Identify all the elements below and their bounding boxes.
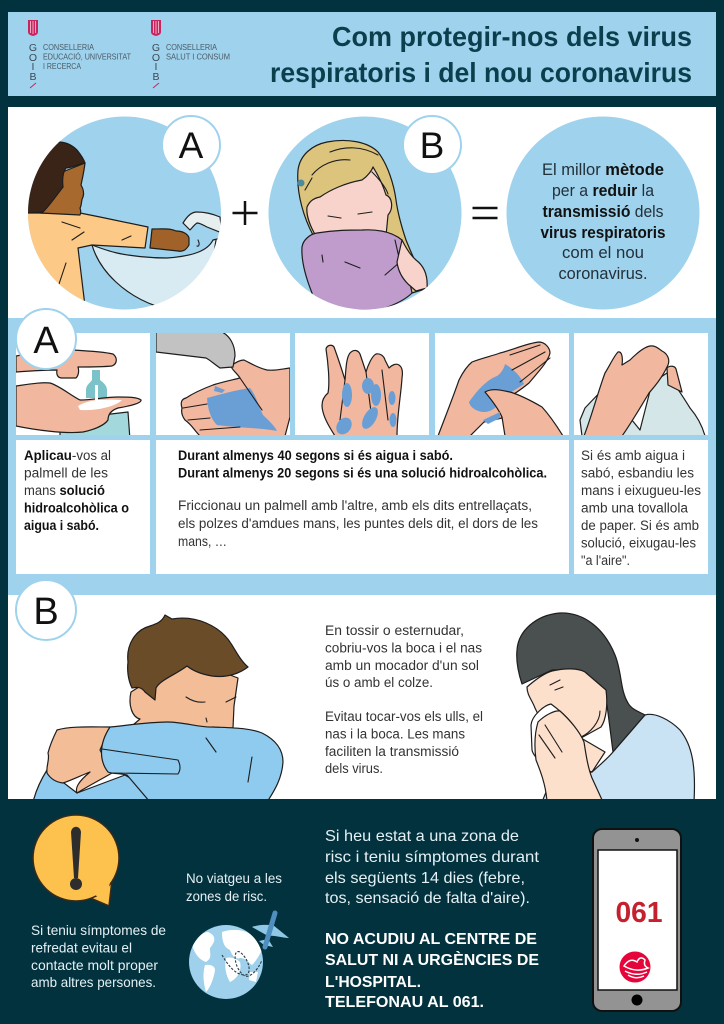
callout: best method circle: com el nou xyxy=(562,244,644,262)
badge: section B xyxy=(16,580,76,640)
text cell: apply soap: Aplicau-vos al xyxy=(24,448,111,463)
warning: contact advice xyxy=(31,815,166,990)
icon: emergency service logo xyxy=(620,952,650,982)
panel: A + B = equation xyxy=(8,107,716,318)
panel: A hand washing steps xyxy=(8,309,716,595)
text block: cough advice: cobriu-vos la boca i el nas xyxy=(325,640,482,656)
callout: best method circle: virus respiratoris xyxy=(540,224,666,242)
text block: symptoms advice xyxy=(31,922,166,990)
text block: symptoms advice: Si teniu símptomes de xyxy=(31,922,166,938)
illustration: child washing hands xyxy=(20,116,230,310)
travel advice xyxy=(186,870,289,999)
text cell: duration and rubbing: mans, … xyxy=(178,533,227,549)
title: respiratoris i del nou coronavirus xyxy=(270,57,692,88)
text block: cough advice: amb un mocador d'un sol xyxy=(325,658,479,673)
text block: symptoms advice: refredat evitau el xyxy=(31,940,132,956)
title: Com protegir-nos dels virus xyxy=(332,21,692,52)
text cell: duration and rubbing xyxy=(156,440,569,574)
logo: Conselleria Salut i Consum: G xyxy=(152,42,160,54)
badge: B xyxy=(403,116,461,174)
callout: best method circle xyxy=(506,116,700,310)
text block: emergency instruction: NO ACUDIU AL CENTRE DE xyxy=(325,931,537,948)
badge: A: A xyxy=(179,125,204,166)
illustration: woman with tissue xyxy=(517,613,694,802)
logo: Conselleria Salut i Consum: B xyxy=(152,71,160,83)
badge: section B: B xyxy=(33,591,59,633)
text block: cough advice: En tossir o esternudar, xyxy=(325,623,464,638)
text block: emergency instruction: tos, sensació de falta d'aire). xyxy=(325,890,530,907)
text block: no travel xyxy=(186,870,282,904)
badge: A xyxy=(162,116,220,174)
text block: emergency instruction: TELEFONAU AL 061. xyxy=(325,994,484,1011)
logo: Conselleria Salut i Consum: CONSELLERIA xyxy=(166,42,217,52)
illustration: girl coughing into elbow xyxy=(268,116,462,310)
logo: Conselleria Educació, Universitat i Recerca xyxy=(28,20,131,88)
equals sign xyxy=(472,208,498,218)
logo: Conselleria Educació, Universitat i Recerca: CONSELLERIA xyxy=(43,42,94,52)
text block: no travel: zones de risc. xyxy=(186,888,267,904)
text block: cough advice: dels virus. xyxy=(325,761,383,776)
text block: symptoms advice: amb altres persones. xyxy=(31,974,156,990)
text cell: apply soap: mans solució xyxy=(24,483,105,498)
text block: cough advice: ús o amb el colze. xyxy=(325,675,433,690)
text cell: rinse and dry: sabó, esbandiu les xyxy=(581,466,694,480)
logo: Conselleria Salut i Consum: SALUT I CONSUM xyxy=(166,52,230,62)
text cell: rinse and dry xyxy=(574,440,708,574)
text block: emergency instruction: risc i teniu símptomes durant xyxy=(325,849,540,866)
text block: cough advice: Evitau tocar-vos els ulls, el xyxy=(325,709,483,724)
logo: Conselleria Educació, Universitat i Recerca: I xyxy=(32,61,34,73)
text block: symptoms advice: contacte molt proper xyxy=(31,957,158,973)
badge: B: B xyxy=(420,125,444,166)
illustration: man coughing into elbow xyxy=(33,615,283,805)
text cell: duration and rubbing: Durant almenys 20 segons si és una solució hidroalcohòlica. xyxy=(178,466,547,480)
callout: best method circle: transmissió dels xyxy=(542,203,664,221)
text cell: apply soap xyxy=(16,440,150,574)
title xyxy=(270,21,692,88)
icon: speech bubble exclamation xyxy=(33,815,119,906)
step image: rubbing palms xyxy=(435,333,569,436)
callout: best method circle: El millor mètode xyxy=(542,161,664,179)
text block: cough advice: nas i la boca. Les mans xyxy=(325,726,465,742)
text cell: rinse and dry: solució, eixugau-les xyxy=(581,536,696,550)
text cell: rinse and dry: Si és amb aigua i xyxy=(581,448,685,463)
text cell: rinse and dry: mans i eixugueu-les xyxy=(581,483,701,498)
text cell: rinse and dry: "a l'aire". xyxy=(581,553,630,568)
logo: Conselleria Educació, Universitat i Recerca: B xyxy=(29,71,37,83)
text block: cough advice xyxy=(325,623,483,776)
icon: globe with plane xyxy=(189,913,289,999)
header panel xyxy=(8,12,716,96)
callout: best method circle: per a reduir la xyxy=(552,182,655,200)
step image: wet hands under tap xyxy=(156,332,290,436)
text block: emergency instruction: Si heu estat a una zona de xyxy=(325,828,519,845)
text cell: duration and rubbing: Friccionau un palmell amb l'altre, amb els dits entrellaçats, xyxy=(178,498,532,513)
text block: cough advice: faciliten la transmissió xyxy=(325,744,459,759)
step image: drying with towel xyxy=(574,333,708,436)
logo: Conselleria Educació, Universitat i Recerca: I RECERCA xyxy=(43,61,81,71)
text cell: rinse and dry: de paper. Si és amb xyxy=(581,518,699,533)
logo: Conselleria Salut i Consum: O xyxy=(152,52,160,64)
text cell: apply soap: aigua i sabó. xyxy=(24,518,99,533)
text cell: apply soap: palmell de les xyxy=(24,466,108,480)
text block: emergency instruction: els següents 14 dies (febre, xyxy=(325,870,525,887)
callout: best method circle: coronavirus. xyxy=(558,265,648,283)
logo: Conselleria Educació, Universitat i Recerca: O xyxy=(29,52,37,64)
text cell: duration and rubbing: els polzes d'amdues mans, les puntes dels dit, el dors de les xyxy=(178,516,538,531)
text block: emergency instruction: L'HOSPITAL. xyxy=(325,974,421,991)
text cell: duration and rubbing: Durant almenys 40 segons si és aigua i sabó. xyxy=(178,448,453,463)
logo: Conselleria Salut i Consum xyxy=(151,20,230,88)
badge: section A: A xyxy=(33,320,59,362)
badge: section A xyxy=(16,309,76,369)
plus sign xyxy=(232,201,258,225)
text block: emergency instruction xyxy=(325,828,540,1011)
text block: emergency instruction: SALUT NI A URGÈNCIES DE xyxy=(325,952,539,969)
logo: Conselleria Salut i Consum: I xyxy=(155,61,157,73)
text cell: rinse and dry: amb una tovallola xyxy=(581,500,688,516)
logo: Conselleria Educació, Universitat i Recerca: EDUCACIÓ, UNIVERSITAT xyxy=(43,52,131,62)
phone number: 061 xyxy=(616,897,662,929)
text cell: apply soap: hidroalcohòlica o xyxy=(24,500,129,516)
text block: no travel: No viatgeu a les xyxy=(186,870,282,886)
step image: rubbing fingers xyxy=(295,333,429,437)
step image: soap dispensing xyxy=(16,333,150,440)
panel: B cough etiquette xyxy=(8,580,716,805)
logo: Conselleria Educació, Universitat i Recerca: G xyxy=(29,42,37,54)
icon: phone showing 061 xyxy=(593,829,681,1011)
